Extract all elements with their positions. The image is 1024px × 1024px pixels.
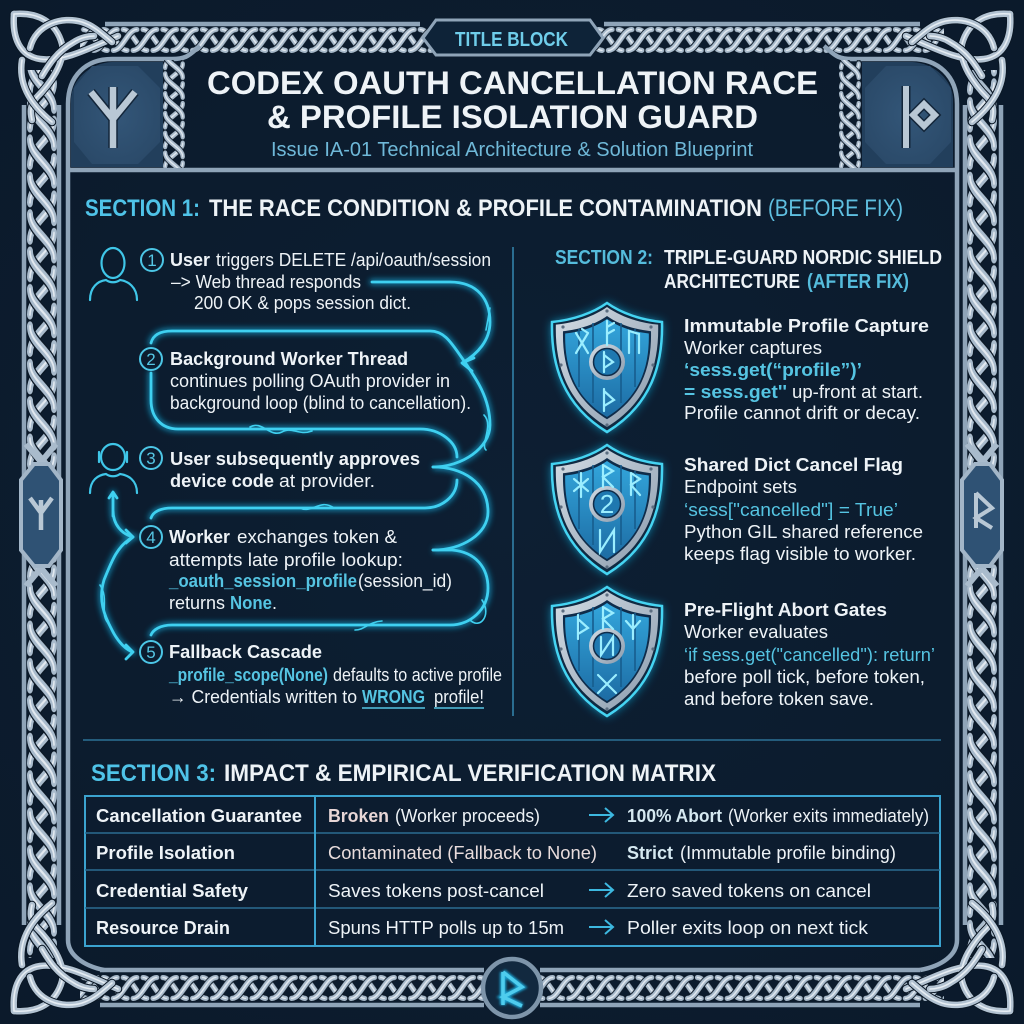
- row: credential safety: Credential Safety: [96, 881, 248, 901]
- section 1 heading: THE RACE CONDITION & PROFILE CONTAMINATION: [209, 195, 762, 222]
- row: cancellation guarantee: 100% Abort: [627, 806, 722, 826]
- step 4: .: [272, 593, 277, 613]
- bottom rune medallion: [483, 959, 541, 1017]
- top braid: [80, 27, 944, 53]
- step 4: Worker: [169, 527, 230, 547]
- step 2: continues polling OAuth provider in: [170, 371, 450, 391]
- side rune plaque: left: [21, 444, 61, 586]
- section 2 heading: TRIPLE-GUARD NORDIC SHIELD: [664, 247, 942, 269]
- step 3: [140, 447, 420, 491]
- step 1: triggers DELETE /api/oauth/session: [216, 250, 491, 270]
- step 4: _oauth_session_profile: [168, 571, 357, 591]
- corner knot: top left: [14, 14, 118, 122]
- step 4: None: [230, 593, 272, 613]
- row: cancellation guarantee: (Worker proceeds): [395, 806, 540, 826]
- rune stone: right: [862, 62, 953, 167]
- step 4: 4: [146, 528, 156, 547]
- row: credential safety: Saves tokens post-cancel: [328, 881, 544, 901]
- row: profile isolation: Contaminated (Fallback to None): [328, 843, 597, 863]
- step 4: (session_id): [358, 571, 452, 592]
- row: resource drain: Poller exits loop on next tick: [627, 918, 869, 938]
- step 5: → Credentials written to: [169, 687, 357, 707]
- icon: shield 3: [552, 587, 662, 716]
- guard 1 text: Worker captures: [684, 338, 822, 358]
- row: credential safety: [96, 881, 871, 901]
- row: cancellation guarantee: Broken: [328, 806, 389, 826]
- step 2: [140, 348, 471, 413]
- row: profile isolation: Strict: [627, 843, 673, 863]
- step 2: 2: [146, 350, 156, 369]
- right braid: [967, 70, 997, 958]
- guard 3 text: Pre-Flight Abort Gates: [684, 600, 887, 620]
- row: profile isolation: (Immutable profile binding): [680, 843, 896, 863]
- step 5: WRONG: [362, 687, 425, 707]
- step 3: 3: [146, 449, 156, 468]
- subtitle: Issue IA-01 Technical Architecture & Solution Blueprint: [271, 139, 753, 161]
- left braid: [27, 70, 57, 958]
- icon: shield 2: [552, 445, 662, 574]
- step 5: 5: [146, 643, 156, 662]
- bottom braid: [80, 975, 944, 1001]
- step 5: defaults to active profile: [333, 665, 502, 685]
- row: credential safety: Zero saved tokens on cancel: [627, 881, 871, 901]
- section 2 heading: [555, 247, 942, 293]
- icon: user with headset: [90, 444, 137, 493]
- small braid: right: [839, 60, 861, 168]
- rune stone: left: [71, 62, 163, 167]
- step 2: Background Worker Thread: [170, 349, 408, 369]
- guard 2 text: ‘sess["cancelled"] = True’: [684, 500, 898, 520]
- step 5: [140, 641, 502, 708]
- step 4: returns: [169, 593, 225, 613]
- step 1: 1: [147, 251, 157, 270]
- guard 3 text: ‘if sess.get("cancelled"): return’: [684, 645, 935, 665]
- guard 1 text: Immutable Profile Capture: [684, 316, 929, 336]
- guard 3 text: and before token save.: [684, 689, 874, 709]
- section 3 heading: IMPACT & EMPIRICAL VERIFICATION MATRIX: [224, 760, 716, 787]
- title: CODEX OAUTH CANCELLATION RACE: [207, 65, 818, 101]
- step 5: _profile_scope(None): [168, 665, 328, 685]
- icon: user: [90, 248, 137, 300]
- side rune plaque: right: [962, 444, 1002, 586]
- row: resource drain: [96, 918, 869, 938]
- step 4: exchanges token &: [237, 527, 397, 547]
- row: resource drain: Resource Drain: [96, 918, 230, 938]
- guard 3 text: before poll tick, before token,: [684, 667, 925, 687]
- step 5: profile!: [434, 687, 484, 707]
- guard 1 text: Profile cannot drift or decay.: [684, 403, 920, 423]
- row: resource drain: Spuns HTTP polls up to 15m: [328, 918, 564, 938]
- guard 1 text: [684, 316, 929, 423]
- icon: shield 2: 2: [600, 489, 614, 519]
- guard 3 text: [684, 600, 935, 709]
- step 1: 200 OK & pops session dict.: [194, 293, 411, 313]
- corner knot: bottom left: [14, 903, 118, 1011]
- step 3: at provider.: [279, 471, 375, 491]
- column divider: [512, 247, 514, 716]
- guard 1 text: ‘sess.get(“profile”)’: [684, 360, 862, 380]
- row: cancellation guarantee: [96, 806, 929, 826]
- flow lines: [100, 282, 490, 659]
- guard 2 text: Endpoint sets: [684, 477, 797, 497]
- title block tab: TITLE BLOCK: [455, 29, 568, 51]
- section 2 heading: (AFTER FIX): [807, 271, 909, 293]
- step 3: device code: [170, 471, 274, 491]
- step 1: –> Web thread responds: [171, 272, 361, 292]
- title: [207, 65, 818, 135]
- corner knot: bottom right: [906, 903, 1010, 1011]
- section 1 heading: SECTION 1:: [85, 195, 200, 222]
- row: cancellation guarantee: Cancellation Guarantee: [96, 806, 302, 826]
- guard 2 text: [684, 455, 923, 564]
- step 2: background loop (blind to cancellation).: [170, 393, 471, 413]
- guard 3 text: Worker evaluates: [684, 622, 828, 642]
- step 3: User subsequently approves: [170, 449, 420, 469]
- section 3 heading: SECTION 3:: [91, 760, 216, 787]
- step 4: attempts late profile lookup:: [169, 550, 403, 570]
- corner knot: top right: [906, 14, 1010, 122]
- guard 2 text: Shared Dict Cancel Flag: [684, 455, 903, 475]
- row: profile isolation: [96, 843, 896, 863]
- panel: race condition flow: [90, 248, 502, 708]
- step 1: [141, 249, 491, 313]
- row: cancellation guarantee: (Worker exits immediately): [728, 806, 929, 826]
- section 2 heading: SECTION 2:: [555, 247, 653, 269]
- small braid: left: [163, 60, 185, 168]
- guard 1 text: up-front at start.: [792, 382, 923, 402]
- step 5: Fallback Cascade: [169, 642, 322, 662]
- icon: shield 1: [552, 303, 662, 432]
- guard 1 text: = sess.get'': [684, 382, 787, 402]
- panel: shield guards: [552, 303, 935, 716]
- title: & PROFILE ISOLATION GUARD: [267, 99, 758, 135]
- step 4: [140, 526, 452, 613]
- impact matrix table: [85, 796, 940, 946]
- guard 2 text: Python GIL shared reference: [684, 522, 923, 542]
- title block tab: [423, 20, 603, 55]
- step 1: User: [170, 250, 210, 270]
- guard 2 text: keeps flag visible to worker.: [684, 544, 916, 564]
- section 2 heading: ARCHITECTURE: [664, 271, 800, 293]
- row: profile isolation: Profile Isolation: [96, 843, 235, 863]
- section 1 heading: (BEFORE FIX): [768, 195, 903, 222]
